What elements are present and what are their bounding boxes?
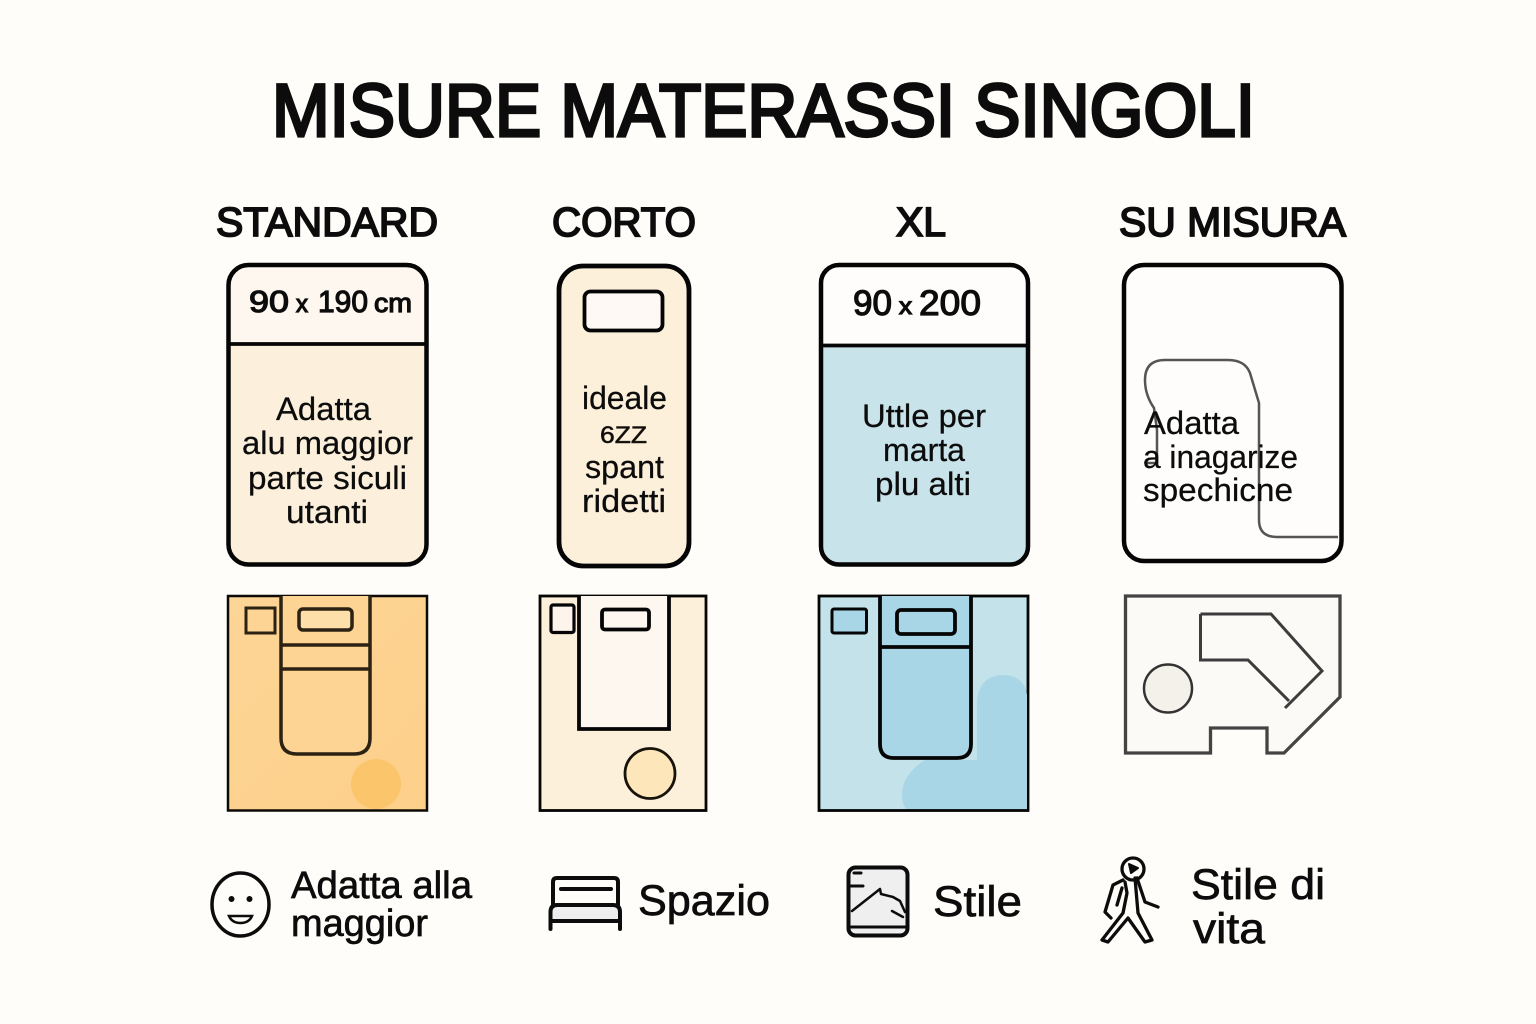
description: corto [582, 380, 667, 519]
description: standard [242, 391, 413, 530]
description: xl: plu alti [875, 466, 971, 502]
nightstand [246, 608, 275, 633]
size label: 90 x 200: 200 [919, 284, 981, 323]
label: Stile [933, 878, 1022, 926]
description: standard: utanti [286, 494, 368, 530]
description: corto: 6ZZ [600, 422, 647, 449]
rug [902, 675, 1027, 809]
bed [579, 596, 669, 729]
description: standard: Adatta [276, 391, 371, 427]
panel: xl mattress card [821, 265, 1028, 564]
icon: picture [848, 868, 908, 936]
description: corto: spant [585, 449, 664, 485]
description: xl: marta [883, 432, 965, 468]
floor plan: standard [228, 596, 427, 810]
panel: corto mattress card [559, 266, 689, 566]
size label: 90 x 200 [853, 284, 981, 323]
description: xl: Uttle per [862, 398, 986, 434]
bed [880, 596, 971, 758]
icon: bed [550, 878, 620, 929]
feature: stile di vita [1102, 858, 1325, 953]
size label: 90 x 190 cm: x [296, 291, 308, 318]
label: maggior [291, 903, 428, 945]
feature: adatta alla maggior [212, 865, 473, 945]
pillow [584, 292, 662, 330]
floor plan: corto [540, 596, 706, 810]
description: su misura: a inagarize [1143, 439, 1298, 475]
size label: 90 x 200: x [899, 293, 913, 319]
description: su misura: Adatta [1144, 405, 1239, 441]
heading: standard: STANDARD [216, 199, 438, 245]
icon: walking person [1102, 858, 1158, 942]
rug [625, 748, 675, 798]
rug [351, 759, 401, 809]
icon: smiley [212, 873, 269, 936]
feature: stile [848, 868, 1022, 936]
size label: 90 x 190 cm: 90 [249, 284, 289, 319]
label: Spazio [638, 877, 770, 925]
label: Adatta alla [291, 865, 473, 907]
nightstand [832, 609, 866, 633]
description: standard: alu maggior [242, 425, 413, 461]
custom bed [1200, 614, 1322, 708]
label [1191, 861, 1325, 953]
label [291, 865, 473, 945]
floor plan: xl [819, 596, 1028, 810]
description: xl [862, 398, 986, 502]
description: su misura: spechicne [1143, 472, 1293, 508]
label: Stile di [1191, 861, 1325, 909]
nightstand [551, 605, 574, 632]
panel: standard mattress card [228, 265, 426, 564]
custom shape outline [1145, 360, 1338, 537]
label: vita [1193, 905, 1265, 953]
heading: corto: CORTO [552, 199, 696, 245]
bed [281, 596, 370, 754]
panel: su misura mattress card [1124, 265, 1342, 561]
description: corto: ridetti [582, 483, 666, 519]
description: corto: ideale [582, 380, 667, 416]
heading: su misura: SU MISURA [1119, 199, 1347, 245]
feature: spazio [550, 877, 770, 929]
title: MISURE MATERASSI SINGOLI [272, 69, 1255, 152]
floor plan: su misura [1126, 596, 1340, 753]
description: standard: parte siculi [248, 460, 407, 496]
size label: 90 x 200: 90 [853, 284, 892, 323]
description: su misura [1143, 405, 1298, 508]
round table [1144, 664, 1192, 712]
size label: 90 x 190 cm: cm [374, 288, 412, 318]
heading: xl: XL [896, 199, 946, 245]
size label: 90 x 190 cm [249, 284, 412, 319]
size label: 90 x 190 cm: 190 [318, 284, 368, 319]
